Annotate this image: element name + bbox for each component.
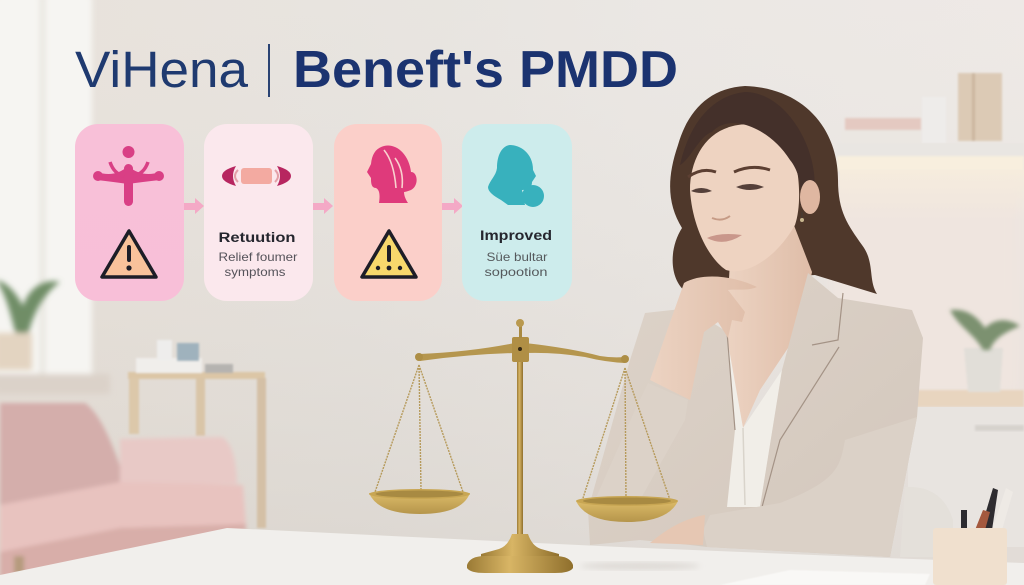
- blurred console table: [128, 340, 266, 528]
- arrow 3: [442, 198, 463, 214]
- arrow 2: [313, 198, 333, 214]
- balance scale: [369, 319, 678, 573]
- icon: pink figure: [93, 146, 164, 206]
- scale left pan: [369, 489, 470, 514]
- card 4 heading: Improved: [480, 228, 552, 243]
- card 2 heading: Retuution: [218, 230, 296, 245]
- card 2 text: [218, 250, 298, 279]
- scale beam: [420, 343, 625, 363]
- face: [690, 124, 799, 271]
- title: [75, 41, 678, 99]
- window at left: [0, 0, 110, 394]
- blouse: [717, 337, 782, 507]
- hair back: [670, 86, 877, 294]
- left sleeve cuff: [595, 383, 688, 520]
- lower resting hand: [650, 515, 705, 545]
- arrow 1: [184, 198, 204, 214]
- scale pivot block and knob: [415, 319, 629, 363]
- icon: warning triangle orange: [102, 231, 156, 277]
- scale base: [467, 534, 573, 573]
- card 4 text: Süe bultar: [486, 250, 548, 264]
- office chair back: [900, 487, 953, 557]
- ear and earring: [800, 180, 820, 222]
- brand name: ViHena: [75, 41, 249, 98]
- title divider: [268, 44, 270, 97]
- panel: card 1: [75, 124, 184, 301]
- blazer lapel shadow: [727, 293, 843, 507]
- card 2 text: symptoms: [224, 265, 286, 279]
- scale pole: [517, 360, 523, 545]
- icon: teal person: [488, 145, 544, 207]
- right shelf with books: [837, 73, 1024, 220]
- blurred pink sofa: [0, 403, 246, 585]
- icon: pill band: [222, 166, 291, 186]
- card 4 text: [484, 250, 548, 279]
- icon: warning triangle yellow: [362, 231, 416, 277]
- card 4 text: sopootion: [484, 265, 548, 279]
- panel: card 4: [462, 124, 572, 301]
- title text: Beneft's PMDD: [293, 41, 678, 99]
- right cabinet, shelf and plant: [908, 310, 1024, 547]
- scale right pan: [576, 496, 678, 522]
- blurred plant on window sill: [0, 280, 60, 370]
- scale left chains: [375, 365, 463, 492]
- woman: [588, 86, 923, 557]
- blazer lower sleeve: [703, 417, 917, 557]
- card 2 text: Relief foumer: [218, 250, 298, 264]
- scale right chains: [583, 368, 670, 500]
- panel: card 2: [204, 124, 313, 301]
- panel: card 3: [334, 124, 442, 301]
- icon: head silhouette: [367, 146, 417, 203]
- white table surface: [0, 528, 1024, 585]
- neck and chest: [726, 215, 812, 428]
- pencil cup with pens: [933, 488, 1013, 585]
- eyes, brows, nose and lips: [688, 167, 770, 242]
- hair front: [680, 92, 815, 205]
- beige blazer: [588, 273, 923, 557]
- forearm and raising hand: [650, 276, 757, 400]
